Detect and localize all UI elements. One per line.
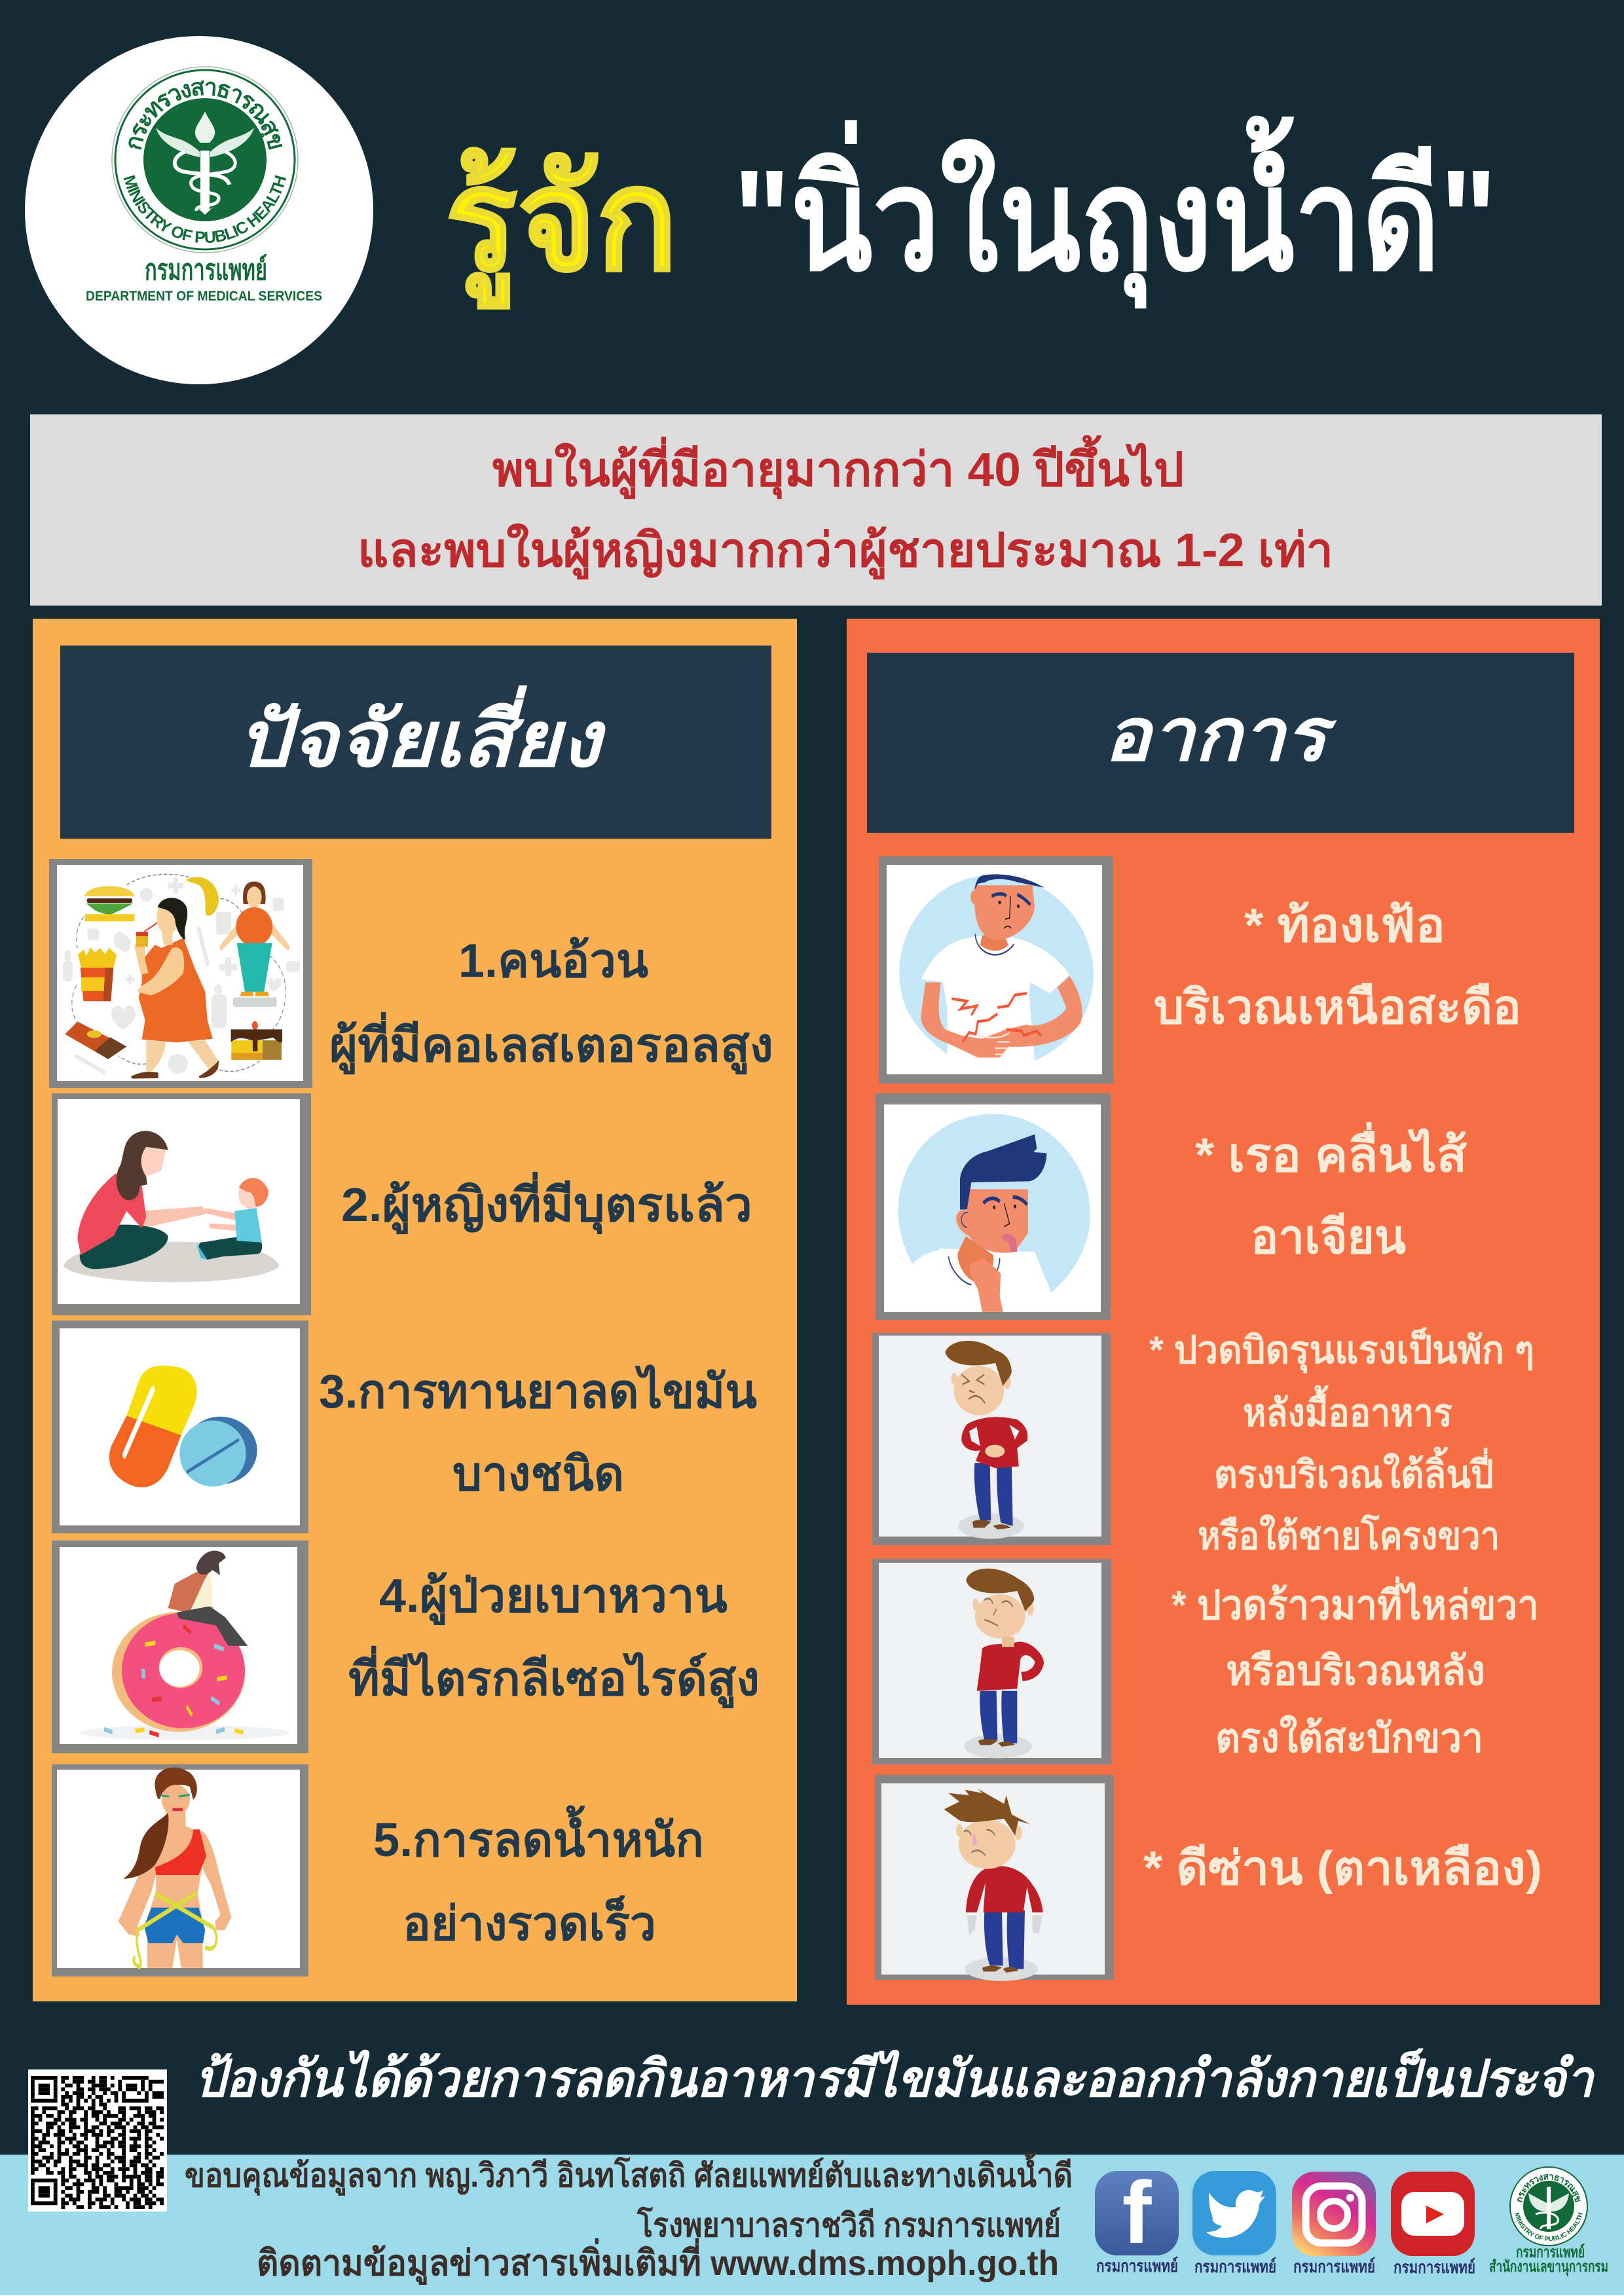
picture frame 2: mother and child: [52, 1093, 311, 1315]
symptom texts: หรือบริเวณหลัง: [1226, 1649, 1485, 1694]
risk factor texts: 4.ผู้ป่วยเบาหวาน: [379, 1570, 728, 1626]
symptom texts: ตรงใต้สะบักขวา: [1215, 1715, 1483, 1761]
icon: small ministry seal: MINISTRY OF PUBLIC HEALTH: [1515, 2212, 1583, 2241]
heading: risk factors: [60, 646, 771, 839]
icon: small ministry seal: กรมการแพทย์: [1516, 2243, 1585, 2261]
risk factor texts: ผู้ที่มีคอเลสเตอรอลสูง: [329, 1011, 773, 1075]
banner: age and gender: และพบในผู้หญิงมากกว่าผู้ชายประมาณ 1-2 เท่า: [358, 522, 1333, 580]
symptom texts: อาเจียน: [1251, 1211, 1406, 1264]
picture frame 2: nausea: [876, 1093, 1111, 1320]
picture frame 4: donut: [52, 1540, 308, 1753]
symptom texts: * ดีซ่าน (ตาเหลือง): [1143, 1842, 1542, 1895]
symptom texts: บริเวณเหนือสะดือ: [1154, 981, 1521, 1034]
title: [445, 115, 1497, 309]
logo: ministry badge circle: [25, 36, 373, 384]
banner: age and gender: พบในผู้ที่มีอายุมากกว่า 40 ปีขึ้นไป: [492, 435, 1184, 500]
banner: age and gender: [30, 414, 1602, 606]
icon: facebook: [1095, 2163, 1179, 2262]
title: "นิ่วในถุงน้ำดี": [733, 115, 1497, 309]
risk factor texts: 2.ผู้หญิงที่มีบุตรแล้ว: [341, 1171, 752, 1235]
risk factor texts: 3.การทานยาลดไขมัน: [319, 1364, 757, 1418]
risk factor texts: 1.คนอ้วน: [458, 935, 648, 987]
picture frame 1: bloating: [879, 856, 1113, 1084]
credits text: โรงพยาบาลราชวิถี กรมการแพทย์: [637, 2206, 1061, 2244]
icon labels: กรมการแพทย์: [1096, 2256, 1178, 2276]
risk factor texts: [319, 935, 773, 1950]
picture frame 5: rapid weight loss: [52, 1764, 308, 1977]
panel: risk factors: [33, 619, 797, 2001]
icon: small ministry seal: [1489, 2166, 1608, 2277]
logo: ministry badge circle: MINISTRY OF PUBLIC HEALTH: [123, 175, 286, 244]
symptom texts: * ท้องเฟ้อ: [1244, 900, 1445, 952]
risk factor texts: ที่มีไตรกลีเซอไรด์สูง: [348, 1645, 760, 1709]
symptom texts: * เรอ คลื่นไส้: [1195, 1121, 1467, 1182]
symptom texts: หลังมื้ออาหาร: [1243, 1385, 1452, 1434]
symptom texts: * ปวดบิดรุนแรงเป็นพัก ๆ: [1149, 1327, 1534, 1374]
heading: symptoms: [867, 653, 1574, 833]
title: รู้จัก: [445, 141, 678, 309]
icon: twitter: [1192, 2171, 1276, 2255]
picture frame 3: colic pain: [872, 1333, 1111, 1545]
credits text: [185, 2151, 1073, 2285]
picture frame 5: jaundice: [875, 1775, 1114, 1981]
icon labels: กรมการแพทย์: [1393, 2257, 1475, 2277]
panel: symptoms: [847, 619, 1600, 2005]
risk factor texts: 5.การลดน้ำหนัก: [373, 1805, 704, 1867]
credits text: ขอบคุณข้อมูลจาก พญ.วิภาวี อินทโสตถิ ศัลยแพทย์ตับและทางเดินน้ำดี: [185, 2151, 1073, 2196]
icon: instagram: [1292, 2172, 1376, 2256]
logo: ministry badge circle: กระทรวงสาธารณสุข: [128, 80, 283, 150]
credits text: ติดตามข้อมูลข่าวสารเพิ่มเติมที่ www.dms.moph.go.th: [257, 2238, 1059, 2285]
icon labels: กรมการแพทย์: [1194, 2257, 1276, 2276]
heading: symptoms: อาการ: [1104, 694, 1337, 776]
picture frame 4: referred pain: [872, 1559, 1111, 1764]
symptom texts: [1143, 900, 1542, 1895]
icon labels: กรมการแพทย์: [1293, 2257, 1375, 2276]
risk factor texts: บางชนิด: [452, 1448, 624, 1501]
logo: ministry badge circle: กรมการแพทย์: [145, 253, 267, 286]
QR code: [28, 2069, 167, 2212]
icon: small ministry seal: กระทรวงสาธารณสุข: [1517, 2174, 1581, 2202]
prevention slogan: ป้องกันได้ด้วยการลดกินอาหารมีไขมันและออกกำลังกายเป็นประจำ: [194, 2048, 1595, 2107]
symptom texts: หรือใต้ชายโครงขวา: [1198, 1513, 1500, 1558]
symptom texts: ตรงบริเวณใต้ลิ้นปี่: [1214, 1447, 1494, 1496]
icon: facebook: f: [1122, 2163, 1153, 2262]
picture frame 3: pills: [52, 1321, 308, 1533]
icon: youtube: [1391, 2172, 1475, 2256]
heading: risk factors: ปัจจัยเสี่ยง: [237, 685, 606, 783]
symptom texts: * ปวดร้าวมาที่ไหล่ขวา: [1172, 1576, 1539, 1628]
picture frame 1: obesity: [49, 859, 312, 1088]
risk factor texts: อย่างรวดเร็ว: [403, 1895, 656, 1950]
footer band: [0, 2155, 1624, 2296]
icon labels: [1096, 2256, 1475, 2277]
logo: ministry badge circle: DEPARTMENT OF MEDICAL SERVICES: [86, 289, 322, 304]
